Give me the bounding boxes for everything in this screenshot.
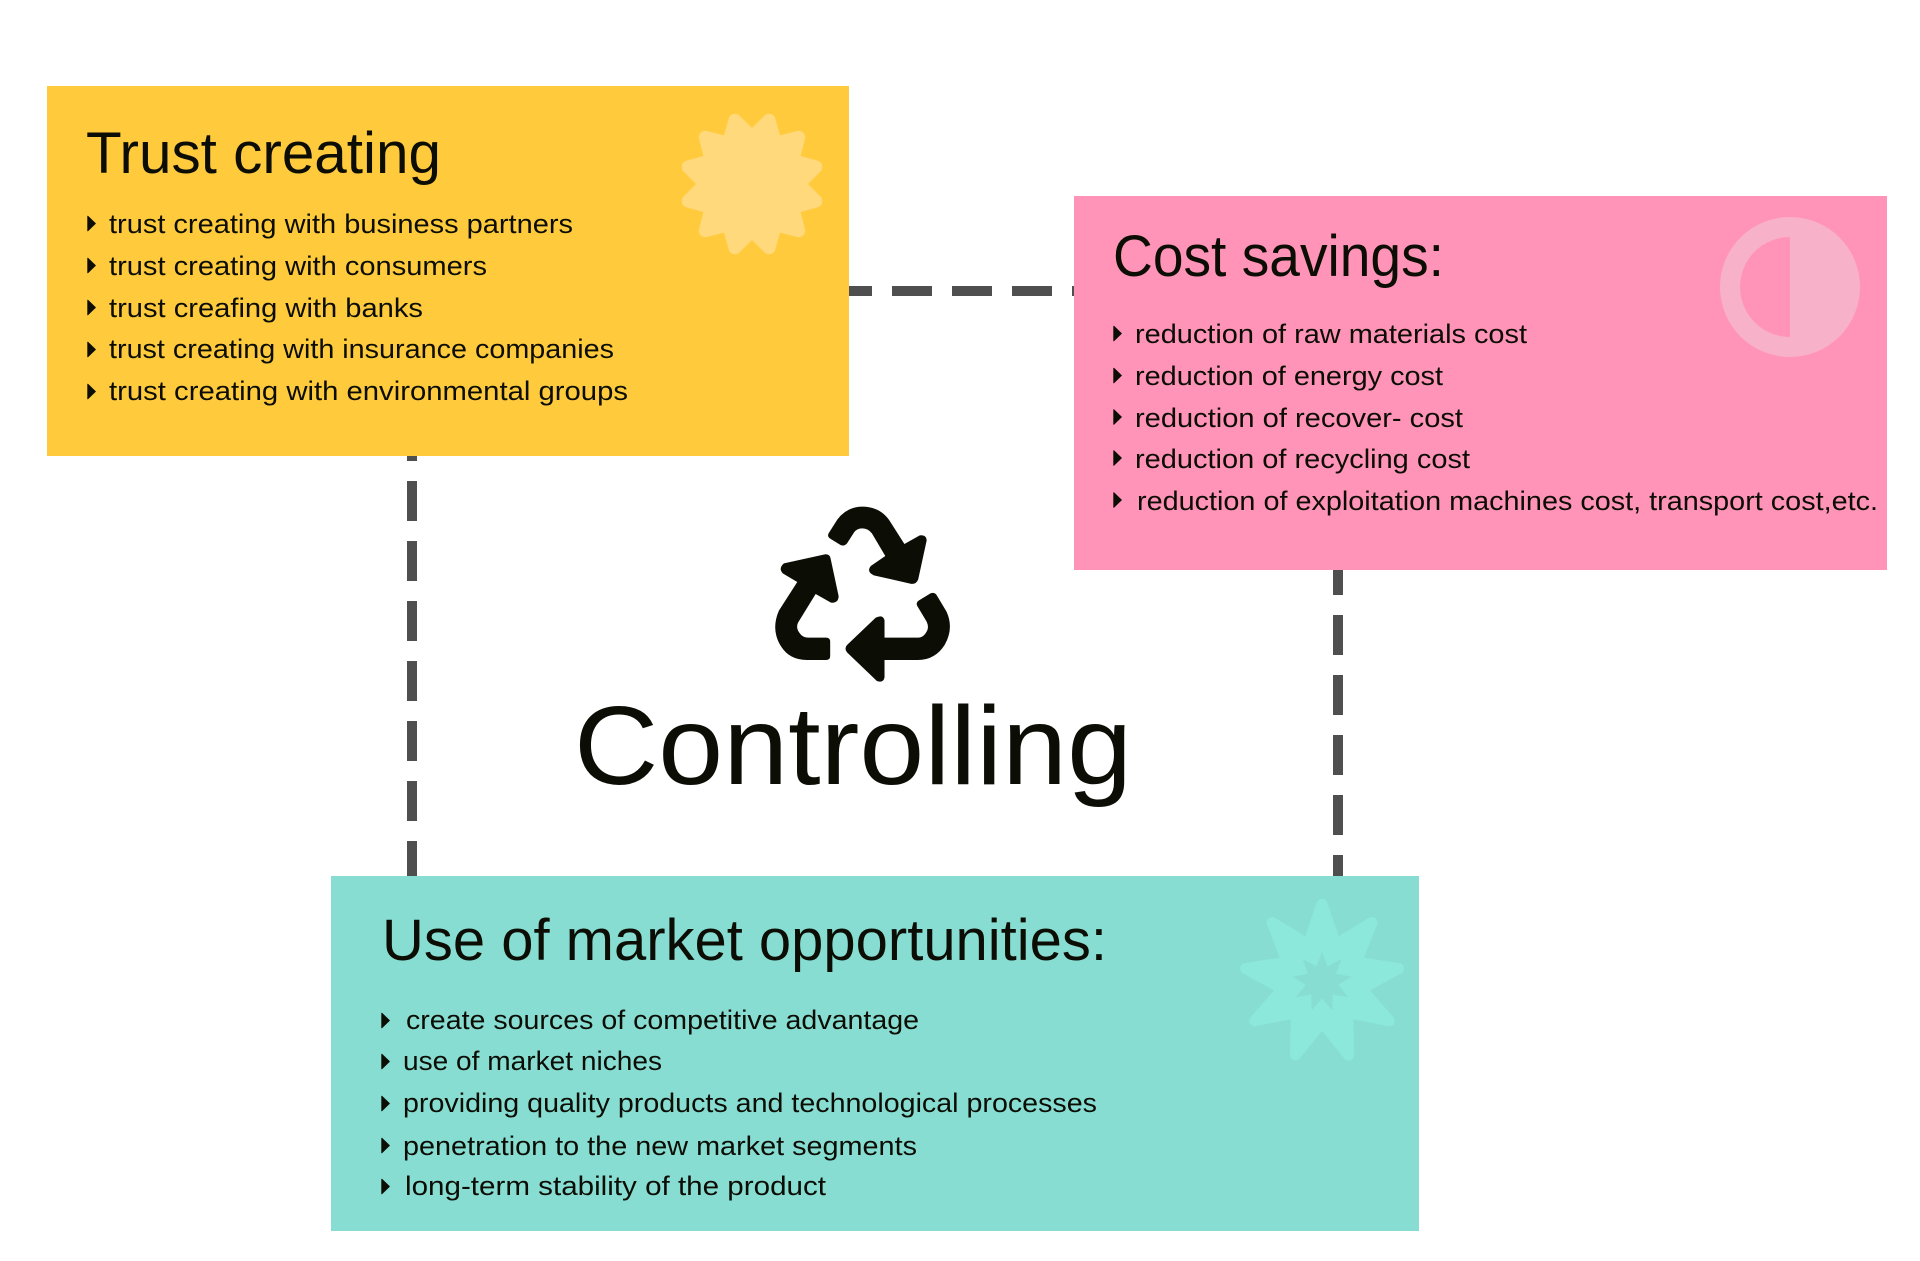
heading: trust creating: Trust creating — [86, 121, 441, 186]
list: trust creating items — [88, 209, 628, 406]
list: market opportunities items: long-term stability of the product — [405, 1171, 827, 1201]
dashed connector: trust creating to market opportunities — [407, 456, 417, 876]
panel: trust creating — [47, 86, 849, 456]
list: trust creating items: trust creating with insurance companies — [109, 334, 614, 364]
heading: use of market opportunities: Use of market opportunities: — [382, 908, 1107, 973]
list: cost savings items: reduction of recover- cost — [1135, 403, 1464, 433]
list: market opportunities items: providing quality products and technological processes — [403, 1088, 1097, 1118]
list: cost savings items: reduction of raw materials cost — [1135, 319, 1528, 349]
dashed connector: trust creating to cost savings — [849, 286, 1074, 296]
list: market opportunities items: create sources of competitive advantage — [406, 1005, 919, 1035]
dashed connector: cost savings to market opportunities — [1333, 570, 1343, 876]
panel: use of market opportunities — [331, 876, 1419, 1231]
list: market opportunities items: penetration to the new market segments — [403, 1131, 917, 1161]
list: trust creating items: trust creating with business partners — [109, 209, 573, 239]
list: cost savings items: reduction of recycling cost — [1135, 444, 1471, 474]
list: cost savings items: reduction of exploitation machines cost, transport cost,etc. — [1137, 486, 1878, 516]
list: trust creating items: trust creating with environmental groups — [109, 376, 628, 406]
icon: half circle ring — [1720, 217, 1860, 357]
icon: recycling arrows — [775, 507, 950, 682]
heading: cost savings: Cost savings: — [1113, 224, 1444, 289]
icon: starburst — [688, 120, 816, 248]
list: cost savings items — [1114, 319, 1878, 516]
list: trust creating items: trust creating with consumers — [109, 251, 487, 281]
panel: cost savings — [1074, 196, 1887, 570]
list: cost savings items: reduction of energy cost — [1135, 361, 1444, 391]
list: market opportunities items: use of market niches — [403, 1046, 662, 1076]
icon: nine point star — [1246, 904, 1398, 1055]
list: market opportunities items — [382, 1005, 1097, 1201]
list: trust creating items: trust creafing with banks — [109, 293, 423, 323]
title: controlling: Controlling — [574, 684, 1132, 808]
